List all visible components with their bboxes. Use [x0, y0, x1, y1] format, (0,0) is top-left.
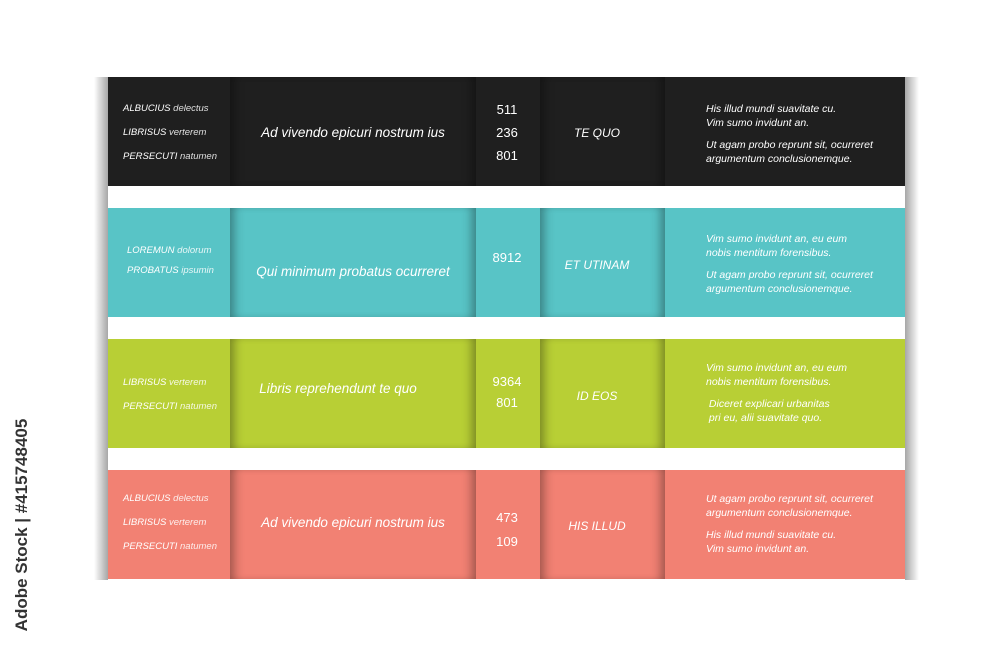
tag: ID EOS — [577, 389, 617, 403]
left labels: PERSECUTI natumen — [123, 151, 217, 162]
numbers: 109 — [496, 534, 518, 549]
description: argumentum conclusionemque. — [706, 283, 852, 295]
numbers: 801 — [496, 148, 518, 163]
description: Vim sumo invidunt an. — [706, 543, 809, 555]
left labels: PERSECUTI natumen — [123, 401, 217, 412]
description: pri eu, alii suavitate quo. — [709, 412, 822, 424]
description: argumentum conclusionemque. — [706, 153, 852, 165]
row 1: black — [108, 77, 905, 186]
center text: Ad vivendo epicuri nostrum ius — [261, 515, 445, 530]
description: nobis mentitum forensibus. Ut agam probo reprunt sit, ocurreret — [706, 247, 873, 281]
left labels: LIBRISUS verterem — [123, 377, 206, 388]
tag: HIS ILLUD — [568, 519, 626, 533]
left labels: ALBUCIUS delectus — [123, 103, 209, 114]
row 4: salmon — [108, 470, 905, 579]
left shadow — [94, 77, 108, 580]
left labels — [127, 245, 214, 276]
description: His illud mundi suavitate cu. — [706, 103, 836, 115]
description: Vim sumo invidunt an, eu eum — [706, 233, 847, 245]
row 3: green — [108, 339, 905, 448]
center text: Libris reprehendunt te quo — [259, 381, 417, 396]
description — [706, 103, 874, 165]
numbers: 801 — [496, 395, 518, 410]
left labels — [122, 493, 217, 552]
numbers: 511 — [497, 102, 517, 117]
description: Vim sumo invidunt an. Ut agam probo reprunt sit, ocurreret — [706, 117, 873, 151]
description — [706, 362, 847, 424]
description: argumentum conclusionemque. His illud mundi suavitate cu. — [706, 507, 852, 541]
numbers — [496, 102, 518, 163]
tag: TE QUO — [574, 126, 620, 140]
left labels: LIBRISUS verterem — [123, 127, 206, 138]
numbers — [493, 374, 522, 410]
left labels — [122, 103, 217, 162]
numbers: 236 — [496, 125, 518, 140]
numbers: 473 — [496, 510, 518, 525]
description: Vim sumo invidunt an, eu eum — [706, 362, 847, 374]
left labels — [123, 377, 217, 412]
left labels: ALBUCIUS delectus — [123, 493, 209, 504]
center text: Ad vivendo epicuri nostrum ius — [261, 125, 445, 140]
left labels: PERSECUTI natumen — [123, 541, 217, 552]
description — [706, 233, 874, 295]
tag: ET UTINAM — [565, 258, 629, 272]
center text: Qui minimum probatus ocurreret — [256, 264, 450, 279]
description — [706, 493, 874, 555]
left labels: LOREMUN dolorum — [127, 245, 211, 256]
row 2: teal — [108, 208, 905, 317]
numbers: 9364 — [493, 374, 521, 389]
left labels: PROBATUS ipsumin — [127, 265, 214, 276]
numbers: 8912 — [493, 250, 521, 265]
description: nobis mentitum forensibus. Diceret explicari urbanitas — [706, 376, 831, 410]
left labels: LIBRISUS verterem — [123, 517, 206, 528]
numbers — [496, 510, 518, 549]
right shadow — [905, 77, 919, 580]
description: Ut agam probo reprunt sit, ocurreret — [706, 493, 873, 505]
watermark id: Adobe Stock | #415748405 — [12, 419, 31, 631]
